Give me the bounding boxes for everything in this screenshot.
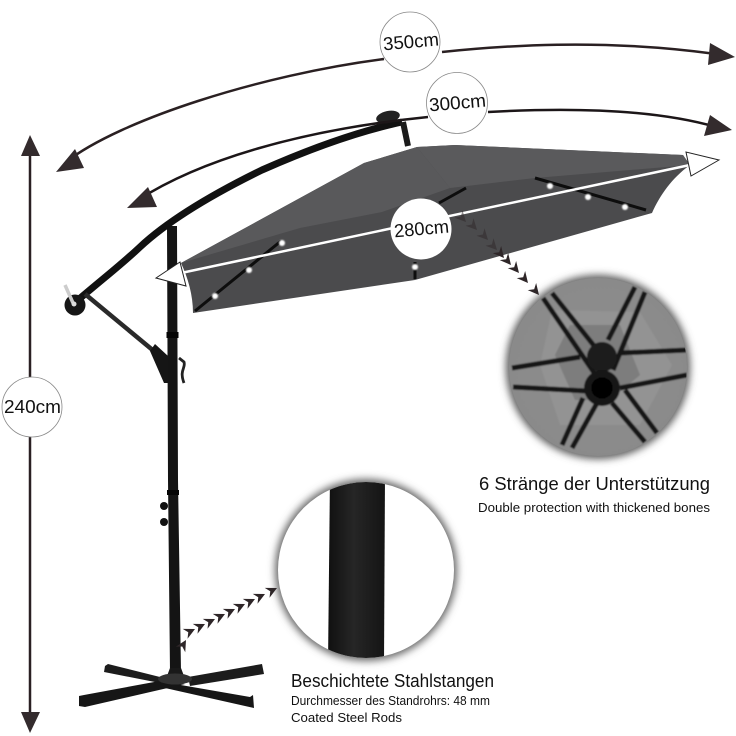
label circle: 240cm: 240cm [4,396,61,417]
label circle: 300cm: 300cm [428,90,487,115]
label circle: 240cm [2,377,62,437]
label circle: 280cm [390,198,452,260]
text block: six support ribs: 6 Stränge der Unterstützung [479,473,710,494]
ribs under canopy [195,178,646,311]
detail circle: six support ribs [500,270,700,470]
text block: six support ribs: Double protection with thickened bones [478,500,710,515]
text block: coated steel rods: Coated Steel Rods [291,710,403,725]
chevron pointer to ribs detail [454,210,543,299]
text block: coated steel rods: Durchmesser des Standrohrs: 48 mm [291,694,490,708]
arrow: 240cm height [21,135,40,733]
label circle: 350cm [380,12,440,72]
label circle: 350cm: 350cm [382,29,440,54]
label circle: 280cm: 280cm [393,216,450,241]
arrow: 280cm span [156,152,719,286]
canopy [181,145,690,313]
umbrella pole [160,226,181,672]
arrow: 300cm span [127,110,732,208]
detail circle: coated steel rod [275,475,457,665]
label circle: 300cm [426,72,488,134]
LED lights [212,183,628,299]
canopy front panel top right [417,145,690,188]
arrow: 350cm span [56,43,735,172]
text block: six support ribs [478,473,710,515]
cross base [79,664,264,708]
text block: coated steel rods [291,671,494,725]
text block: coated steel rods: Beschichtete Stahlstangen [291,671,494,691]
curved arm with crank [64,109,408,383]
canopy front panel top left [181,147,450,263]
chevron pointer to rod detail [176,583,279,652]
